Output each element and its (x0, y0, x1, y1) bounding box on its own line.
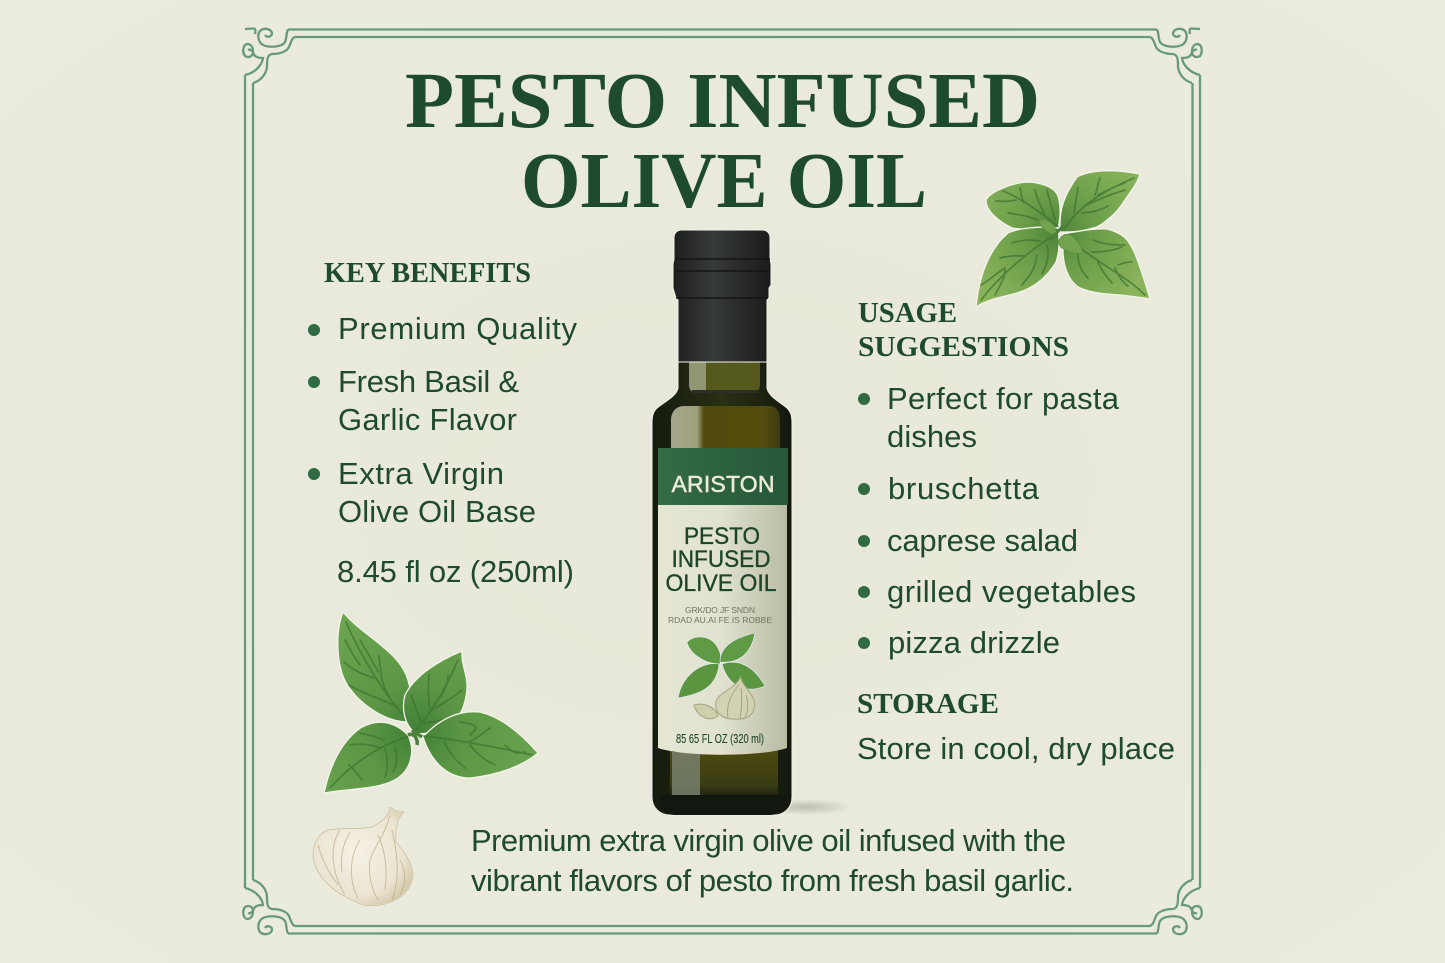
label title (666, 523, 776, 597)
neck liquid (689, 362, 760, 392)
ornamental frame (243, 28, 1202, 934)
label title: PESTO (684, 523, 760, 550)
glass body (652, 360, 792, 815)
benefits list: Olive Oil Base (338, 494, 536, 529)
green band (658, 448, 788, 505)
bottom liquid (670, 750, 778, 800)
usage list: dishes (887, 419, 977, 454)
bottle shadow (757, 799, 853, 815)
usage list (858, 381, 1136, 660)
description: vibrant flavors of pesto from fresh basil garlic. (471, 863, 1074, 898)
icon: basil lower left (324, 612, 538, 793)
heading: usage suggestions (858, 297, 1069, 363)
brand name: ARISTON (672, 471, 774, 497)
title: OLIVE OIL (521, 138, 927, 225)
label volume: 85 65 FL OZ (320 ml) (676, 731, 764, 746)
description (471, 823, 1074, 898)
usage list: Perfect for pasta (887, 381, 1120, 416)
label fine print: GRK/DO JF SNDN (685, 605, 755, 615)
usage list: pizza drizzle (888, 625, 1060, 660)
storage text: Store in cool, dry place (857, 731, 1175, 766)
panel: key benefits (308, 257, 578, 589)
shoulder liquid (671, 406, 780, 448)
benefits list: Extra Virgin (338, 456, 504, 491)
title: PESTO INFUSED (405, 58, 1040, 145)
label fine print: RDAD AU.AI FE IS ROBBE (668, 615, 772, 625)
heading: usage suggestions: USAGE (858, 297, 957, 329)
usage list: bruschetta (888, 471, 1040, 506)
label title: OLIVE OIL (666, 570, 776, 597)
benefits list (308, 311, 578, 529)
label illustration (678, 633, 765, 719)
benefits list: Garlic Flavor (338, 402, 517, 437)
corner ornament top-left (243, 28, 295, 83)
cap (673, 230, 771, 362)
usage list: caprese salad (887, 523, 1078, 558)
heading: storage: STORAGE (857, 688, 999, 720)
panel: storage (857, 688, 1175, 766)
heading: key benefits: KEY BENEFITS (324, 257, 531, 289)
label title: INFUSED (672, 546, 770, 573)
benefits list: Premium Quality (338, 311, 578, 346)
benefits list: Fresh Basil & (338, 364, 519, 399)
volume: 8.45 fl oz (250ml) (337, 554, 574, 589)
icon: basil upper right (976, 171, 1150, 307)
usage list: grilled vegetables (887, 574, 1136, 609)
panel: usage suggestions (858, 297, 1136, 660)
bottle (652, 230, 853, 815)
description: Premium extra virgin olive oil infused with the (471, 823, 1066, 858)
heading: usage suggestions: SUGGESTIONS (858, 331, 1069, 363)
label cream (658, 504, 787, 755)
title (405, 58, 1040, 225)
label fine print (668, 605, 772, 625)
icon: garlic (313, 807, 413, 906)
